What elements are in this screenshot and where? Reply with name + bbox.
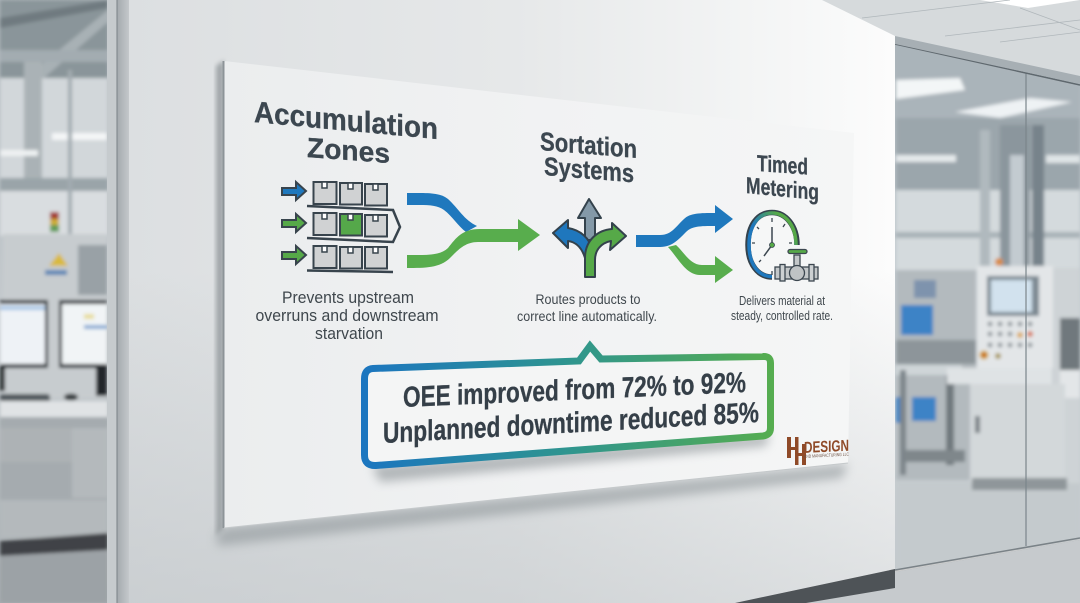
- text: accumulation description: [256, 289, 438, 343]
- section: accumulation zones: [254, 96, 438, 343]
- board shadow: [216, 60, 848, 546]
- callout: results: [364, 346, 770, 466]
- heading: Accumulation Zones: [254, 96, 438, 169]
- heading: Timed Metering: [746, 150, 819, 205]
- door frame: [107, 0, 129, 603]
- text: metering description: steady, controlled rate.: [731, 309, 833, 323]
- ceiling: [820, 0, 1080, 84]
- background: factory seen through right glass: [895, 36, 1080, 580]
- logo: HH Design and Manufacturing: AND MANUFACTURING LLC: [804, 452, 850, 459]
- heading: Timed Metering: Timed: [757, 150, 808, 180]
- background: factory seen through left glass: [0, 0, 108, 603]
- text: OEE result: OEE improved from 72% to 92%: [403, 367, 746, 414]
- callout shadow: [372, 434, 770, 482]
- section: sortation systems: [517, 126, 657, 324]
- icon: accumulation conveyor with boxes: [282, 182, 400, 272]
- text: metering description: [731, 294, 833, 323]
- panel: wall board: [224, 61, 854, 528]
- icon: sortation diverging arrows: [553, 199, 626, 277]
- text: sortation description: Routes products to: [536, 291, 641, 307]
- heading: Accumulation Zones: Accumulation: [254, 96, 438, 146]
- text: accumulation description: starvation: [315, 325, 383, 343]
- heading: Sortation Systems: Systems: [544, 151, 634, 188]
- text: sortation description: [517, 291, 657, 324]
- section: timed metering: [731, 150, 833, 323]
- text: metering description: Delivers material at: [739, 294, 825, 308]
- icon: clock with valve: [748, 212, 818, 281]
- floor: [735, 540, 1080, 603]
- text: accumulation description: Prevents upstream: [282, 289, 414, 307]
- text: accumulation description: overruns and downstream: [256, 307, 438, 325]
- heading: Accumulation Zones: Zones: [307, 132, 390, 169]
- heading: Sortation Systems: Sortation: [540, 126, 637, 164]
- heading: Sortation Systems: [540, 126, 637, 188]
- arrow: merge flow: [407, 193, 540, 268]
- text: sortation description: correct line automatically.: [517, 308, 657, 324]
- text: downtime result: Unplanned downtime reduced 85%: [383, 397, 759, 450]
- logo: HH Design and Manufacturing: DESIGN: [804, 438, 849, 457]
- wall: [129, 0, 895, 603]
- arrow: split flow: [636, 205, 733, 283]
- logo: HH Design and Manufacturing: [787, 437, 850, 465]
- heading: Timed Metering: Metering: [746, 172, 819, 205]
